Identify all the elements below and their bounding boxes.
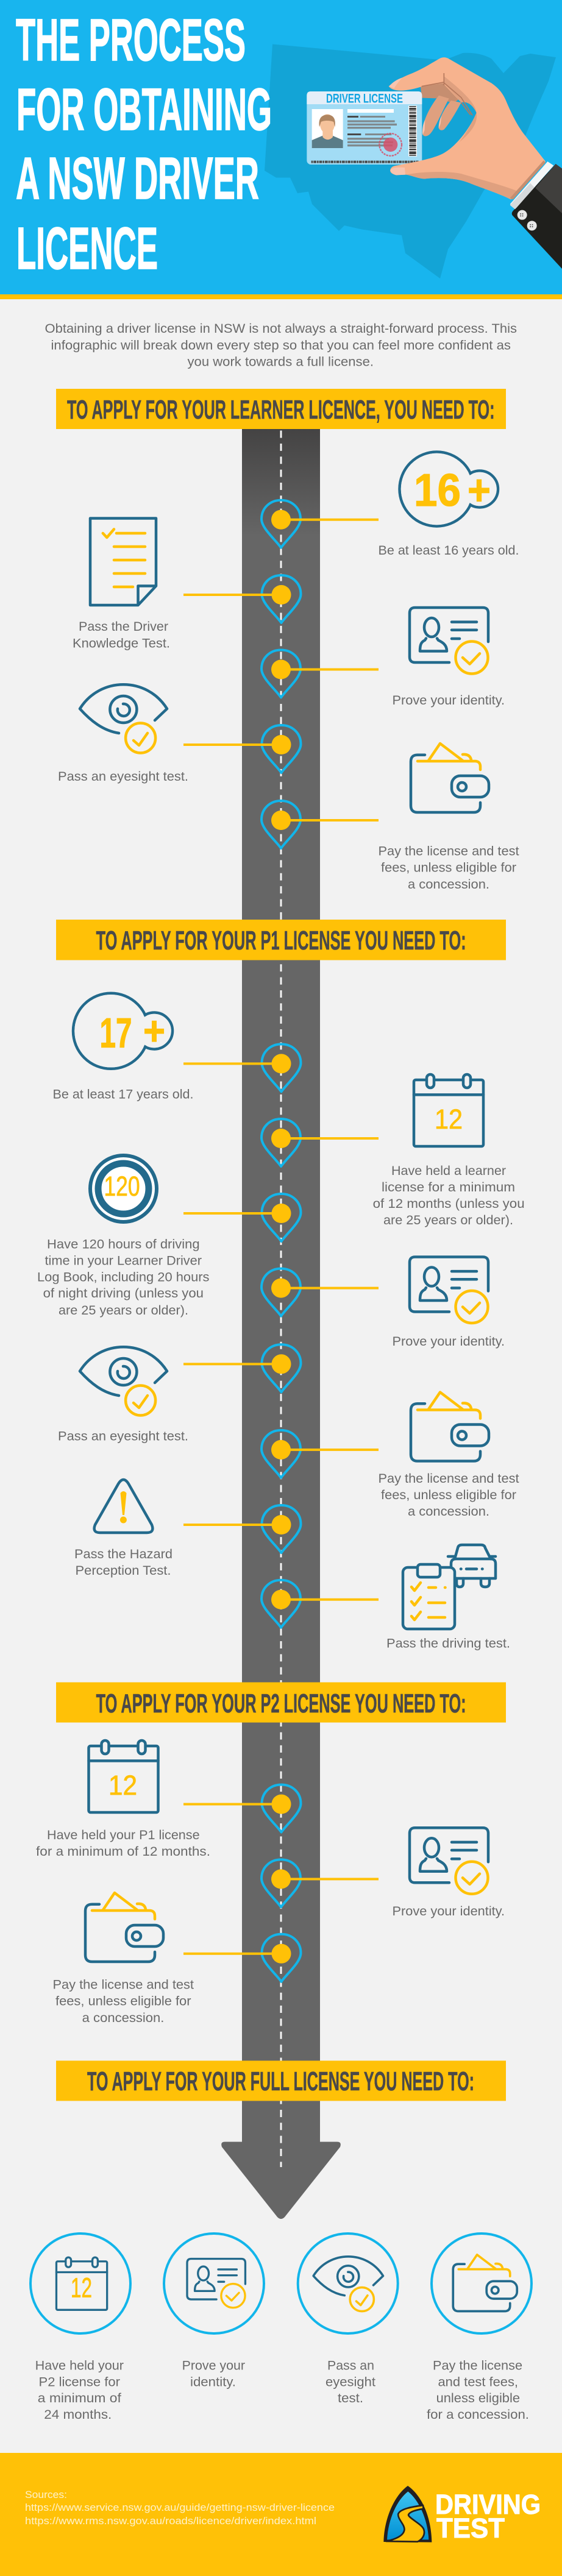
icon: calendar 12: 12 — [108, 1770, 137, 1801]
step: hazard perception — [74, 1480, 301, 1578]
section 1 banner — [56, 389, 506, 429]
illustration: hand holding licence — [307, 57, 562, 269]
label — [52, 1978, 194, 2025]
icon: warning triangle — [94, 1480, 152, 1533]
label: are 25 years or older). — [59, 1304, 188, 1318]
label — [325, 2358, 375, 2405]
step: pay fees — [261, 1392, 519, 1519]
step: eyesight test — [58, 684, 301, 784]
step: pay fees — [52, 1893, 301, 2025]
icon: calendar 12: 12 — [435, 1104, 463, 1135]
icon: 120 badge — [89, 1154, 158, 1224]
label: Have 120 hours of driving — [47, 1237, 200, 1252]
label: Be at least 16 years old. — [378, 544, 519, 558]
icon: 16 plus: + — [468, 466, 491, 514]
icon: id card — [410, 1828, 488, 1894]
label: for a concession. — [427, 2408, 529, 2422]
icon: wallet — [453, 2255, 517, 2311]
icon: calendar 12: 12 — [71, 2273, 92, 2304]
icon: id card — [187, 2258, 245, 2308]
label: Pass an eyesight test. — [58, 1430, 188, 1443]
icon: 120 badge: 120 — [104, 1171, 140, 1202]
label: Have held your P1 license — [47, 1828, 200, 1842]
icon: id card — [410, 608, 488, 674]
label: fees, unless eligible for — [381, 1488, 516, 1502]
label: Have held a learner — [391, 1164, 506, 1178]
label — [378, 845, 519, 892]
step: driving test — [261, 1545, 510, 1650]
label — [378, 1472, 519, 1519]
icon: calendar 12 — [414, 1074, 483, 1146]
label — [73, 620, 170, 651]
section 2 banner — [56, 920, 506, 960]
step: pay fees — [261, 743, 519, 892]
step: at least 17 — [52, 993, 301, 1102]
label — [35, 2358, 124, 2422]
label — [373, 1164, 525, 1227]
step: held learner licence — [261, 1074, 525, 1227]
label: a concession. — [408, 878, 489, 892]
sources: Sources: — [25, 2489, 67, 2500]
label: 24 months. — [44, 2408, 112, 2422]
map of NSW — [265, 44, 556, 279]
label: fees, unless eligible for — [381, 861, 516, 875]
icon: 16 plus — [400, 452, 498, 527]
icon: calendar 12 — [56, 2257, 107, 2310]
label: Log Book, including 20 hours — [37, 1270, 210, 1284]
label: Pay the license and test — [52, 1978, 194, 1992]
step: held P1 licence — [36, 1740, 301, 1859]
icon: wallet — [85, 1893, 163, 1962]
icon: id card — [410, 1257, 488, 1323]
sources — [25, 2489, 335, 2527]
title: FOR OBTAINING — [16, 76, 272, 143]
step: prove identity — [261, 1828, 505, 1918]
icon: car and clipboard — [403, 1545, 496, 1629]
intro text: infographic will break down every step so that you can feel more confident as — [51, 339, 511, 352]
icon: eye — [80, 684, 167, 753]
label: of night driving (unless you — [43, 1286, 204, 1300]
label: and test fees, — [438, 2376, 518, 2389]
intro text: Obtaining a driver license in NSW is not always a straight-forward process. This — [45, 322, 517, 336]
label — [182, 2358, 245, 2389]
header panel — [0, 0, 562, 299]
title: THE PROCESS — [16, 7, 246, 73]
label: P2 license for — [39, 2376, 120, 2389]
intro text: you work towards a full license. — [188, 355, 374, 369]
jacket sleeve — [512, 164, 562, 269]
label: a minimum of — [38, 2391, 121, 2405]
logo: TEST — [436, 2513, 505, 2544]
label: Prove your identity. — [393, 1904, 505, 1918]
label: Pass the Hazard — [74, 1547, 173, 1561]
label: Be at least 17 years old. — [52, 1088, 194, 1102]
label: Pass an eyesight test. — [58, 770, 188, 784]
label: for a minimum of 12 months. — [36, 1845, 210, 1859]
step: eyesight test — [58, 1344, 301, 1443]
label: Prove your identity. — [393, 1335, 505, 1349]
full licence requirement: P2 held — [30, 2234, 130, 2422]
full licence requirement: identity — [164, 2234, 264, 2389]
label: of 12 months (unless you — [373, 1197, 525, 1211]
licence card — [307, 91, 422, 165]
step: prove identity — [261, 608, 505, 708]
road with arrow — [221, 429, 341, 2219]
step: prove identity — [261, 1257, 505, 1349]
label: Pay the license and test — [378, 845, 519, 858]
icon: 17 plus: 17 — [100, 1009, 132, 1057]
full licence requirement: fees — [427, 2234, 532, 2422]
label: Knowledge Test. — [73, 636, 170, 651]
label: Have held your — [35, 2358, 124, 2373]
label: are 25 years or older). — [383, 1213, 513, 1227]
label: Pass the driving test. — [386, 1637, 510, 1650]
title — [16, 7, 272, 282]
icon: 17 plus — [73, 993, 173, 1069]
label: unless eligible — [436, 2391, 520, 2405]
label: Pass the Driver — [79, 620, 168, 634]
shirt cuff — [510, 161, 553, 208]
full licence requirement: eyesight — [298, 2234, 398, 2405]
logo — [383, 2486, 541, 2544]
label — [427, 2358, 529, 2422]
step: 120 hours — [37, 1154, 301, 1318]
label: Pay the license — [433, 2358, 522, 2373]
icon: eye — [313, 2257, 383, 2312]
intro text — [45, 322, 517, 369]
sources: https://www.service.nsw.gov.au/guide/getting-nsw-driver-licence — [25, 2502, 335, 2513]
label — [37, 1237, 210, 1318]
licence card: DRIVER LICENSE — [326, 91, 403, 105]
label: Prove your identity. — [393, 694, 505, 708]
label: license for a minimum — [382, 1180, 515, 1194]
label: Perception Test. — [76, 1564, 171, 1578]
label: Pay the license and test — [378, 1472, 519, 1486]
title: LICENCE — [16, 215, 158, 282]
step: at least 16 — [261, 452, 519, 558]
label: Prove your — [182, 2358, 245, 2373]
label: eyesight — [325, 2376, 375, 2389]
section 4 banner — [56, 2060, 506, 2101]
icon: 17 plus: + — [143, 1008, 165, 1053]
logo: DRIVING — [435, 2489, 541, 2520]
label: identity. — [190, 2376, 236, 2389]
label: time in your Learner Driver — [45, 1254, 202, 1268]
label: a concession. — [408, 1505, 489, 1519]
sources: https://www.rms.nsw.gov.au/roads/licence/driver/index.html — [25, 2515, 316, 2527]
label — [36, 1828, 210, 1859]
footer panel — [0, 2453, 562, 2576]
label: fees, unless eligible for — [55, 1994, 191, 2009]
label: Pass an — [327, 2358, 374, 2373]
title: A NSW DRIVER — [16, 145, 259, 211]
label — [74, 1547, 173, 1578]
icon: 16 plus: 16 — [414, 464, 461, 516]
label: a concession. — [82, 2011, 164, 2025]
icon: wallet — [411, 1392, 489, 1461]
icon: wallet — [411, 743, 489, 812]
label: test. — [338, 2391, 363, 2405]
icon: eye — [80, 1347, 167, 1415]
step: driver knowledge test — [73, 518, 301, 651]
icon: checklist document — [90, 518, 156, 605]
section 3 banner — [56, 1682, 506, 1722]
icon: calendar 12 — [89, 1740, 158, 1812]
